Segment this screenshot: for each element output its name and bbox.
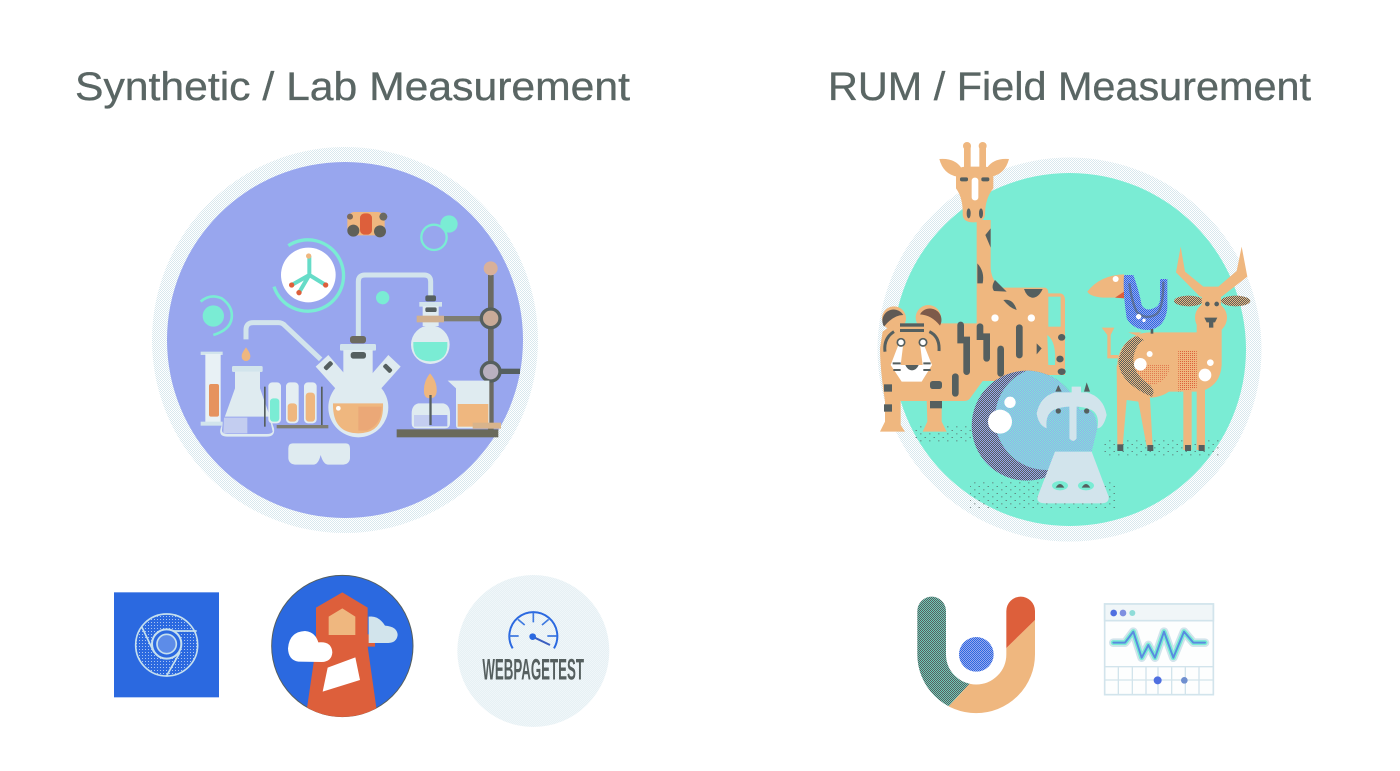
three-neck round flask — [316, 336, 401, 437]
lantern — [329, 608, 355, 635]
beaker — [448, 381, 501, 429]
lighthouse tower — [305, 592, 378, 722]
white molecule badge — [274, 240, 344, 311]
icon: Chrome DevTools — [114, 592, 219, 697]
bottom logos: field tools — [932, 604, 1213, 699]
halo ring — [152, 147, 538, 533]
giraffe markings — [960, 177, 1043, 310]
test tube rack — [264, 382, 328, 428]
tiger stripes — [955, 325, 1019, 393]
ground speckle — [913, 425, 1220, 508]
small mint molecule — [201, 296, 232, 335]
tiger ears and face — [882, 310, 903, 327]
icon: CrUX U logo — [932, 611, 1021, 699]
conical flask — [220, 366, 274, 437]
animals — [880, 142, 1250, 508]
hippo — [1037, 382, 1109, 503]
mint ring and bubble — [421, 215, 458, 250]
giraffe — [939, 142, 1066, 375]
delivery tube right — [358, 275, 431, 337]
spirit burner — [412, 373, 450, 428]
orange molecule — [347, 212, 387, 237]
test cylinder — [201, 352, 223, 426]
retort stand — [397, 261, 520, 437]
icon: WebPageTest: WEBPAGETEST — [482, 654, 584, 687]
halo ring — [878, 158, 1262, 542]
illustration: animals in mint circle — [878, 142, 1262, 541]
globe — [972, 370, 1080, 481]
window — [323, 657, 360, 692]
illustration: laboratory in purple circle — [152, 147, 538, 533]
small round flask — [411, 295, 450, 364]
safety goggles — [288, 443, 350, 465]
tiger — [880, 305, 1047, 432]
mint disc — [893, 173, 1246, 526]
mint dot — [376, 291, 389, 304]
heading: Synthetic / Lab Measurement: Synthetic / Lab Measurement — [75, 65, 630, 109]
toucan — [1087, 274, 1167, 336]
icon: WebPageTest — [457, 575, 609, 727]
icon: Search Console chart — [1105, 604, 1213, 695]
right cloud — [369, 616, 398, 643]
delivery tube left — [246, 323, 321, 359]
deer — [1102, 247, 1250, 451]
bottom logos: lab tools — [114, 575, 609, 727]
heading: RUM / Field Measurement: RUM / Field Measurement — [828, 65, 1311, 109]
lab equipment — [201, 212, 520, 465]
left cloud — [288, 631, 332, 662]
orange drop — [242, 347, 250, 361]
purple disc — [167, 162, 523, 518]
icon: Lighthouse — [272, 575, 413, 722]
